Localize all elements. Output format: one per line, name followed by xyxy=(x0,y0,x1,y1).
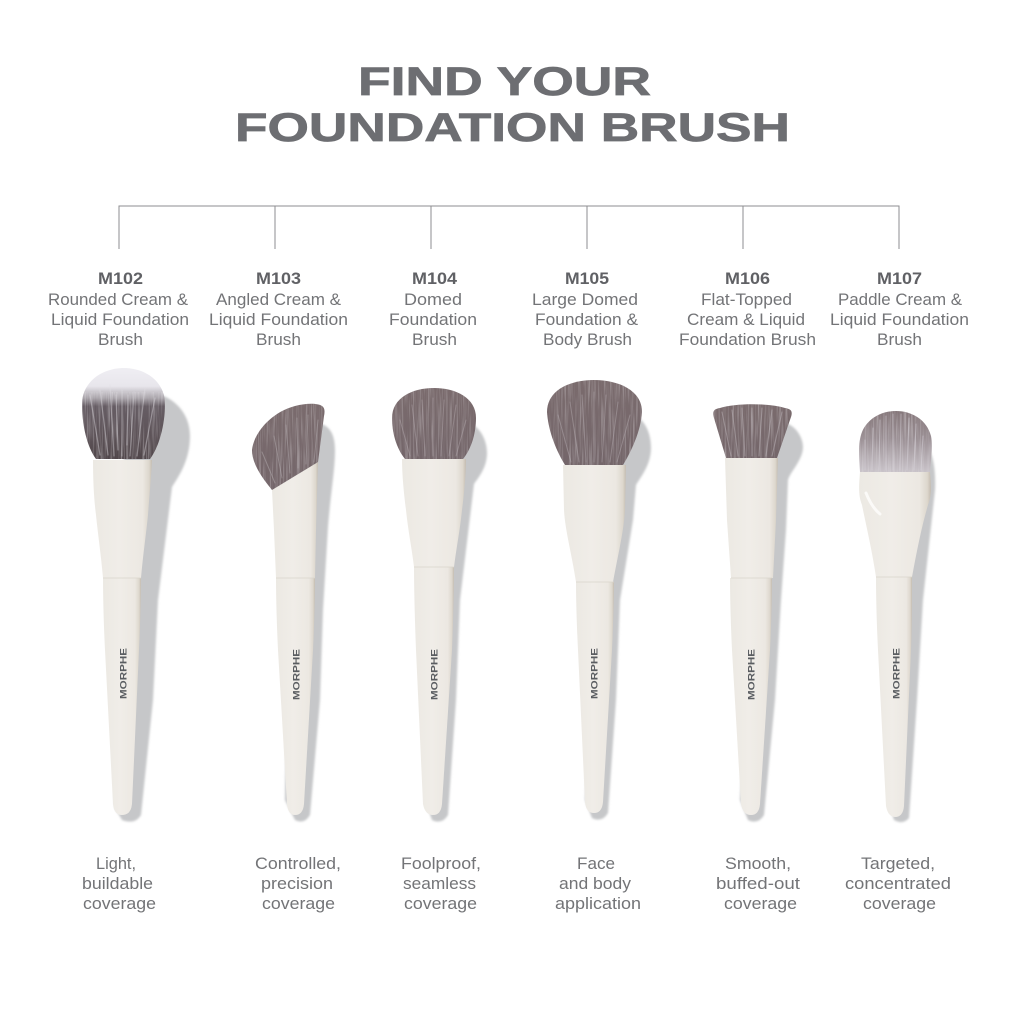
caption: M104: Foolproof, xyxy=(401,855,481,873)
caption: M102: Light, xyxy=(96,855,136,873)
label: M105: Large Domed xyxy=(532,291,638,309)
label: M102: Rounded Cream & xyxy=(48,291,188,309)
label: M102: Liquid Foundation xyxy=(51,311,189,329)
coverage captions xyxy=(82,855,951,913)
caption: M105: and body xyxy=(559,875,632,893)
brush: M107: MORPHE xyxy=(892,648,902,699)
label: M103: Liquid Foundation xyxy=(209,311,348,329)
label: M102: M102 xyxy=(98,270,143,288)
caption: M102: coverage xyxy=(83,895,156,913)
connector bracket xyxy=(119,206,899,249)
label: M105 xyxy=(532,270,638,349)
label: M102: Brush xyxy=(98,331,143,349)
label: M107: Liquid Foundation xyxy=(830,311,969,329)
label: M103 xyxy=(209,270,348,349)
brush: M106 xyxy=(712,403,803,822)
label: M102 xyxy=(48,270,189,349)
caption: M103: Controlled, xyxy=(255,855,341,873)
brush: M105: MORPHE xyxy=(590,648,600,699)
caption: M106: coverage xyxy=(724,895,797,913)
caption: M105 xyxy=(555,855,641,913)
brush: M102: MORPHE xyxy=(118,648,130,699)
label: M104: Brush xyxy=(412,331,457,349)
label: M107: M107 xyxy=(877,270,922,288)
caption: M103: coverage xyxy=(262,895,335,913)
caption: M103 xyxy=(255,855,341,913)
brush: M107 xyxy=(858,410,935,822)
caption: M103: precision xyxy=(261,875,333,893)
caption: M107: coverage xyxy=(863,895,936,913)
caption: M105: Face xyxy=(577,855,615,873)
caption: M106: Smooth, xyxy=(725,855,791,873)
label: M104 xyxy=(389,270,477,349)
label: M103: Brush xyxy=(256,331,301,349)
caption: M102: buildable xyxy=(82,875,153,893)
title xyxy=(235,60,790,150)
label: M106: Cream & Liquid xyxy=(687,311,805,329)
brush: M105 xyxy=(545,378,651,820)
brush: M104: MORPHE xyxy=(430,649,440,700)
caption: M106: buffed-out xyxy=(716,875,800,893)
label: M105: Body Brush xyxy=(543,331,632,349)
caption: M107: concentrated xyxy=(845,875,951,893)
label: M103: M103 xyxy=(256,270,301,288)
title: FIND YOUR xyxy=(358,60,651,104)
caption: M105: application xyxy=(555,895,641,913)
caption: M104: coverage xyxy=(404,895,477,913)
label: M106: M106 xyxy=(725,270,770,288)
caption: M104: seamless xyxy=(403,875,476,893)
label: M104: Foundation xyxy=(389,311,477,329)
label: M107: Brush xyxy=(877,331,922,349)
label: M107 xyxy=(830,270,969,349)
caption: M102 xyxy=(82,855,156,913)
brush: M103: MORPHE xyxy=(292,649,302,700)
label: M105: M105 xyxy=(565,270,609,288)
label: M104: M104 xyxy=(412,270,458,288)
brush: M102 xyxy=(80,368,190,822)
label: M105: Foundation & xyxy=(535,311,638,329)
label: M103: Angled Cream & xyxy=(216,291,341,309)
brush: M106: MORPHE xyxy=(746,649,758,700)
caption: M106 xyxy=(716,855,800,913)
label: M106: Foundation Brush xyxy=(679,331,816,349)
caption: M107 xyxy=(845,855,951,913)
brush: M103 xyxy=(250,402,335,822)
label: M106 xyxy=(679,270,816,349)
caption: M104 xyxy=(401,855,481,913)
label: M106: Flat-Topped xyxy=(701,291,792,309)
brush: M104 xyxy=(390,386,487,822)
label: M104: Domed xyxy=(404,291,462,309)
label: M107: Paddle Cream & xyxy=(838,291,962,309)
title: FOUNDATION BRUSH xyxy=(235,106,790,150)
column labels xyxy=(48,270,969,349)
caption: M107: Targeted, xyxy=(861,855,935,873)
